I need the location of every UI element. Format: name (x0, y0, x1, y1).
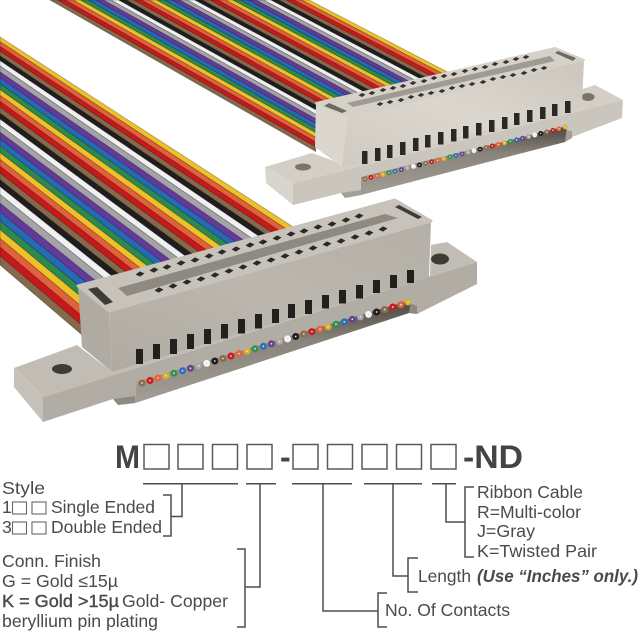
legend: length: (Use “Inches” only.) (477, 566, 638, 586)
leader lines and brackets (143, 484, 474, 627)
ribbon cable: lower connector (0, 36, 293, 335)
legend: style: 3 (2, 517, 12, 537)
legend: ribbon cable: J=Gray (477, 521, 535, 541)
legend: connector finish: G = Gold ≤15µ (2, 571, 118, 591)
lower housing body (78, 200, 431, 372)
legend: style: Double Ended (51, 517, 162, 537)
legend: style: 1 (2, 497, 12, 517)
upper flange (265, 85, 623, 205)
upper housing body (315, 48, 584, 167)
part number heading: - (280, 439, 291, 475)
lower flange (14, 242, 477, 422)
legend: style (2, 478, 162, 537)
upper wire recess (361, 126, 567, 195)
legend: style: Style (2, 478, 45, 498)
lower wire recess (135, 300, 411, 403)
legend: ribbon cable (477, 482, 597, 561)
legend: connector finish: Conn. Finish (2, 551, 101, 571)
upper front slots (362, 101, 570, 164)
legend: connector finish: beryllium pin plating (2, 611, 158, 631)
legend: connector finish: K = Gold >15µ (2, 591, 119, 611)
part number heading: M (115, 439, 140, 475)
legend: style: Single Ended (51, 497, 155, 517)
upper pin holes (359, 55, 547, 106)
connector: lower (14, 200, 477, 422)
legend: ribbon cable: R=Multi-color (477, 502, 581, 522)
connector: upper (265, 48, 623, 205)
lower front slots (136, 270, 414, 364)
part number heading: -ND (463, 439, 523, 475)
legend: number of contacts: No. Of Contacts (385, 600, 510, 620)
part number heading (115, 439, 523, 475)
legend: connector finish: Gold- Copper (122, 591, 228, 611)
lower pin holes (136, 213, 388, 293)
legend: ribbon cable: Ribbon Cable (477, 482, 583, 502)
upper wire ends (363, 125, 567, 181)
legend: connector finish (2, 551, 228, 631)
ribbon cable: upper connector (50, 0, 448, 152)
legend: ribbon cable: K=Twisted Pair (477, 541, 597, 561)
lower wire ends (140, 300, 410, 385)
legend: length: Length (418, 566, 471, 586)
